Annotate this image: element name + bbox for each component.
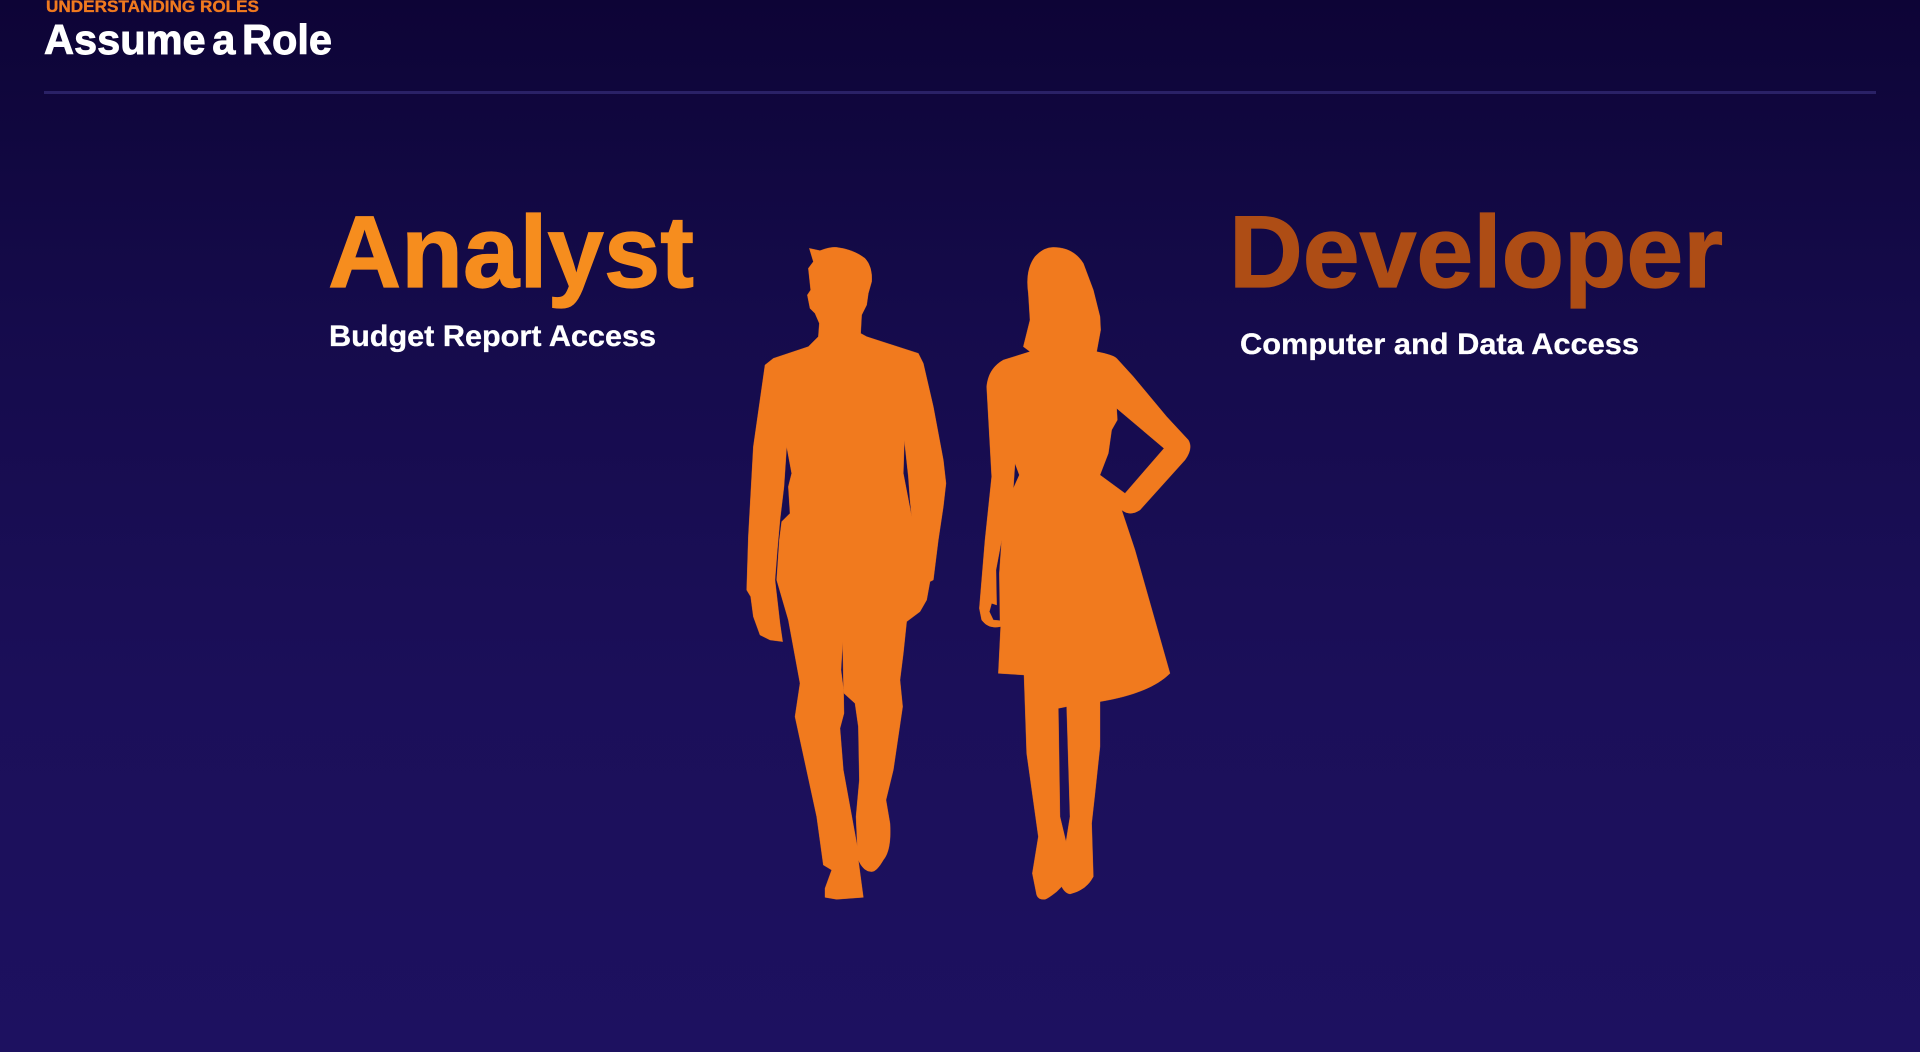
heading: Analyst: Analyst xyxy=(328,195,694,309)
title: Assume a Role xyxy=(44,16,332,63)
heading: Developer: Developer xyxy=(1229,195,1723,309)
icon: female silhouette xyxy=(979,247,1190,899)
icon: male silhouette xyxy=(747,247,946,899)
text: Budget Report Access: Budget Report Access xyxy=(329,320,656,353)
text: Computer and Data Access: Computer and Data Access xyxy=(1240,328,1639,361)
